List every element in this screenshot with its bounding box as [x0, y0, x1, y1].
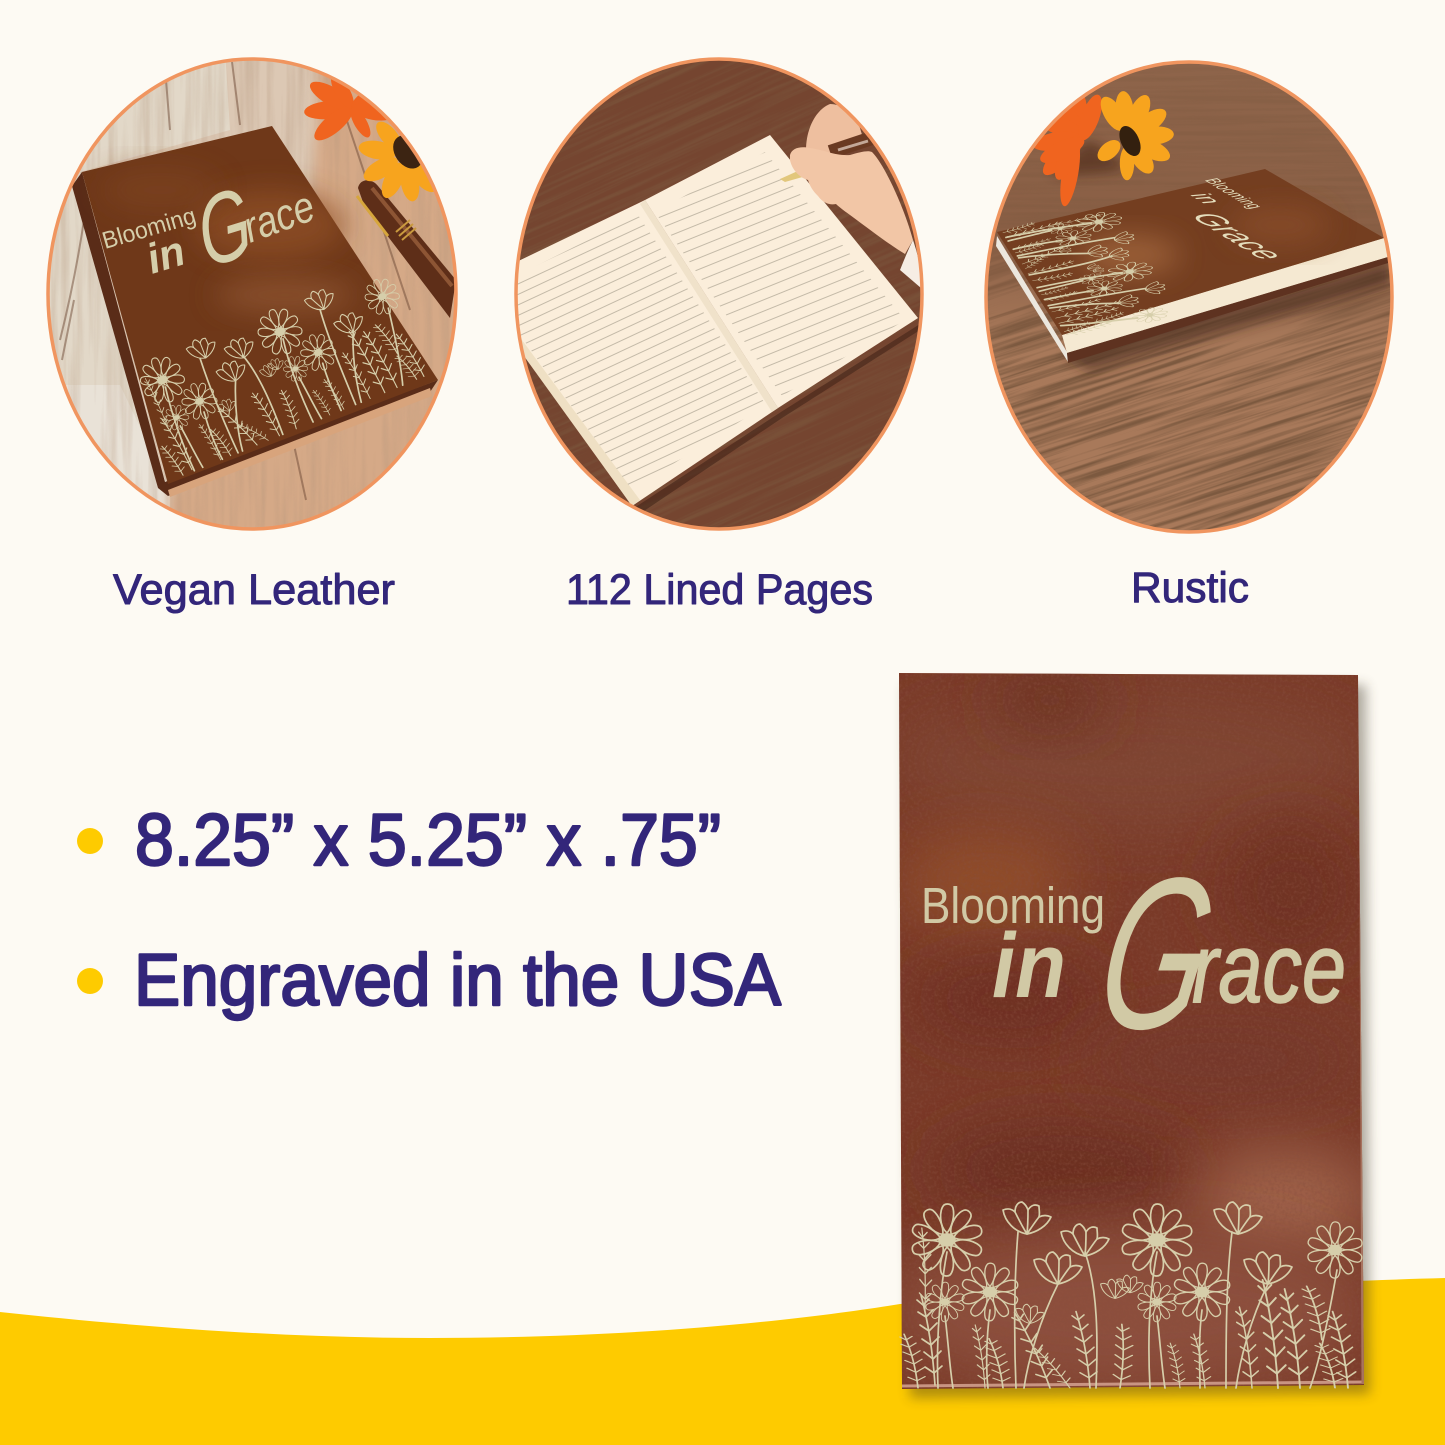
engraved wildflowers — [140, 278, 425, 476]
journal cover — [72, 126, 438, 497]
cover text: in — [141, 227, 190, 283]
cover text — [1190, 178, 1277, 258]
open journal — [508, 135, 920, 515]
cover text: Blooming — [99, 202, 199, 255]
dimensions text: 8.25” x 5.25” x .75” — [135, 800, 721, 881]
photo: vegan leather journal on wood — [40, 50, 470, 540]
photo: lined pages — [514, 57, 924, 531]
flower — [1034, 91, 1174, 206]
hand with pen — [780, 104, 921, 288]
cover text: race — [237, 182, 321, 252]
caption: vegan leather: Vegan Leather — [113, 566, 395, 614]
ruled lines — [655, 152, 905, 396]
photo: rustic journal on wood — [984, 60, 1394, 534]
caption: rustic: Rustic — [1131, 564, 1249, 612]
circle border — [986, 62, 1392, 532]
cover text — [102, 190, 313, 274]
cover text: Blooming — [1200, 177, 1267, 210]
sunflower — [304, 80, 434, 202]
bullet: origin — [77, 968, 103, 994]
journal — [996, 169, 1388, 363]
engraved wildflowers — [1002, 212, 1168, 335]
cover text: in — [1184, 191, 1226, 206]
cover title: in — [992, 915, 1066, 1017]
engraved wildflowers — [900, 1202, 1363, 1392]
bullet: dimensions — [77, 828, 103, 854]
large journal cover — [890, 670, 1375, 1398]
origin text: Engraved in the USA — [134, 940, 781, 1021]
cover text: Grace — [1182, 210, 1293, 262]
circle border — [48, 59, 456, 529]
cover title — [921, 834, 1346, 1075]
cover title: G — [1084, 834, 1230, 1075]
cover title: Blooming — [921, 877, 1105, 934]
cover text: G — [189, 165, 260, 289]
cover title: race — [1192, 913, 1346, 1023]
circle border — [516, 59, 922, 529]
pen — [357, 180, 456, 318]
yellow wave — [0, 1278, 1445, 1445]
caption: lined pages: 112 Lined Pages — [566, 566, 873, 614]
